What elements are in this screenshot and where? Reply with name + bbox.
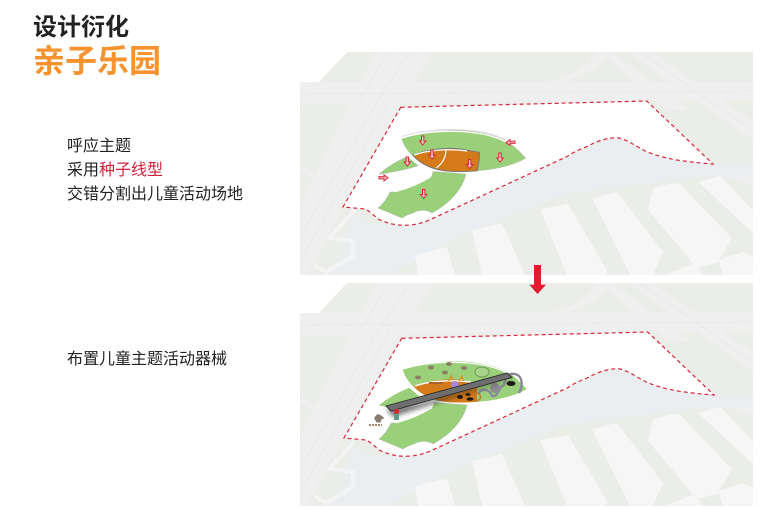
title: parent-child park: 亲子乐园 — [33, 43, 161, 79]
trees — [415, 362, 467, 380]
orange centre — [413, 148, 479, 172]
lower leaf white rim — [396, 408, 432, 422]
top green leaf — [403, 361, 527, 402]
orange centre — [414, 379, 477, 403]
top leaf rim stripes — [402, 130, 505, 140]
lower green leaf — [378, 172, 466, 218]
title: design development: 设计衍化 — [33, 14, 129, 41]
orange white seed lines — [414, 149, 467, 168]
red play item — [394, 409, 399, 420]
left green leaf — [379, 157, 418, 174]
top green leaf — [402, 130, 526, 171]
black stones — [457, 393, 474, 401]
red direction arrows — [379, 136, 515, 198]
panel: seed line layout map — [300, 52, 753, 275]
panel: play equipment map — [300, 283, 753, 506]
climbing frame outline — [475, 367, 489, 377]
animal sculpture and bench — [369, 414, 384, 425]
slide and tube equipment — [474, 374, 522, 400]
site boundary — [344, 332, 714, 456]
top leaf white rim — [403, 362, 507, 373]
left green leaf — [379, 388, 420, 409]
grey elevated walkway — [386, 373, 512, 411]
arrow: down to next step — [529, 265, 546, 294]
beam shadow — [386, 371, 516, 417]
text block: play equipment: 布置儿童主题活动器械 — [67, 351, 227, 368]
text block: seed line concept: 呼应主题 — [67, 138, 131, 155]
lower green leaf — [379, 402, 467, 449]
diagrams: site plans and arrow — [300, 52, 753, 506]
purple play structure — [429, 376, 463, 389]
text block: seed line concept — [67, 137, 243, 203]
lower leaf white rim — [395, 176, 431, 192]
text block: seed line concept: 采用种子线型 — [67, 162, 163, 179]
site boundary — [343, 101, 713, 225]
text block: seed line concept: 交错分割出儿童活动场地 — [67, 186, 243, 203]
upper white seed line — [415, 381, 471, 386]
